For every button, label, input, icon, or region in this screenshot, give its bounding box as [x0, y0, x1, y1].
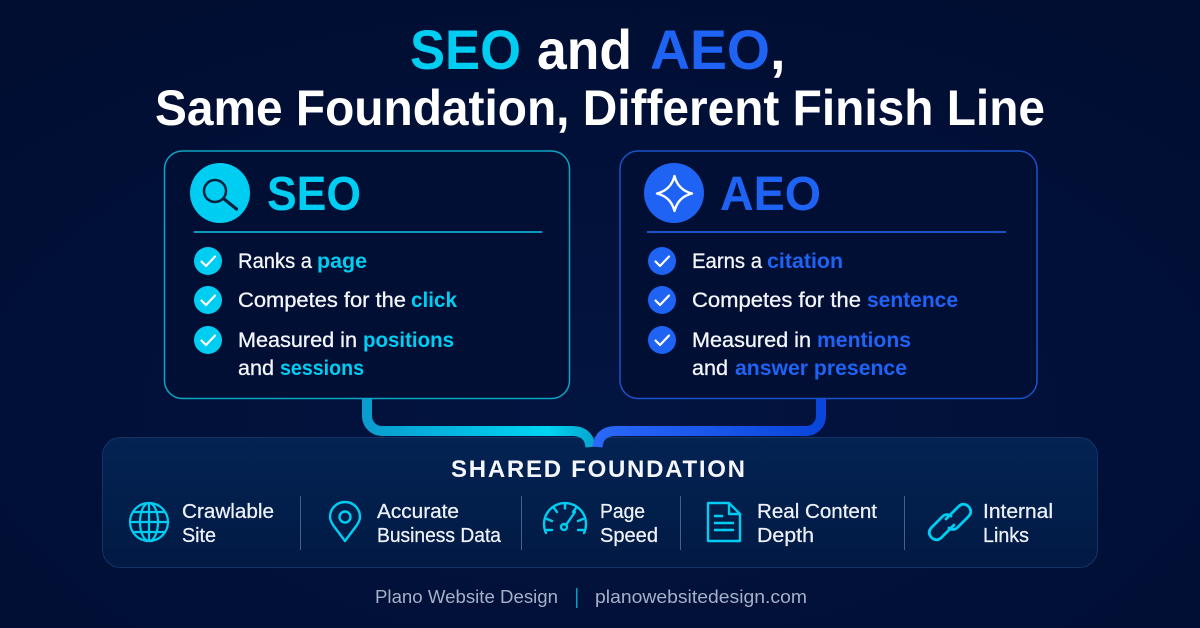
list: SEO points: Competes for the [238, 289, 406, 312]
item: accurate business data: Business Data [377, 525, 502, 547]
item: internal links [929, 501, 1053, 547]
icon: magnifier [190, 163, 250, 223]
list: SEO points: positions [363, 329, 454, 352]
item: page speed [544, 501, 658, 547]
list: AEO points: Earns a [692, 250, 762, 273]
title: SEO [410, 18, 521, 81]
panel: AEO [620, 151, 1037, 398]
title: , [770, 18, 786, 81]
list: SEO points: sessions [280, 357, 364, 380]
item: page speed: Speed [600, 525, 658, 547]
item: crawlable site: Site [182, 525, 216, 547]
list: AEO points: Competes for the [692, 289, 861, 312]
item: internal links: Links [983, 525, 1029, 547]
list: AEO points: mentions [817, 329, 911, 352]
list: SEO points: Ranks a [238, 250, 312, 273]
list: SEO points: click [411, 289, 457, 312]
panel: SEO [164, 151, 570, 398]
heading: shared foundation: SHARED FOUNDATION [451, 456, 745, 483]
panel: shared foundation [102, 438, 1098, 568]
item: real content depth: Real Content [757, 501, 877, 523]
item: real content depth [708, 501, 877, 547]
list: AEO points [648, 247, 958, 380]
item: page speed: Page [600, 501, 645, 523]
footer: planowebsitedesign.com [595, 587, 807, 607]
footer [375, 587, 807, 608]
title [155, 18, 1045, 136]
list: SEO points: page [317, 250, 367, 273]
item: real content depth: Depth [757, 525, 814, 547]
list: SEO points [194, 247, 457, 380]
item: internal links: Internal [983, 501, 1053, 523]
heading: AEO: AEO [720, 168, 821, 221]
connector: SEO to foundation [367, 399, 590, 447]
item: accurate business data: Accurate [377, 501, 459, 523]
item: crawlable site [130, 501, 274, 547]
item: crawlable site: Crawlable [182, 501, 274, 523]
list: SEO points: and [238, 357, 274, 380]
list: AEO points: sentence [867, 289, 958, 312]
list: AEO points: citation [767, 250, 843, 273]
list: AEO points: and [692, 357, 728, 380]
connector: AEO to foundation [598, 399, 821, 447]
title: Same Foundation, Different Finish Line [155, 80, 1045, 136]
footer: Plano Website Design [375, 587, 558, 607]
item: accurate business data [330, 501, 502, 547]
title: AEO [650, 18, 770, 81]
list: AEO points: answer presence [735, 357, 907, 380]
list: SEO points: Measured in [238, 329, 357, 352]
heading: SEO: SEO [267, 168, 361, 221]
list: AEO points: Measured in [692, 329, 811, 352]
title: and [537, 18, 632, 81]
icon: sparkle [644, 163, 704, 223]
